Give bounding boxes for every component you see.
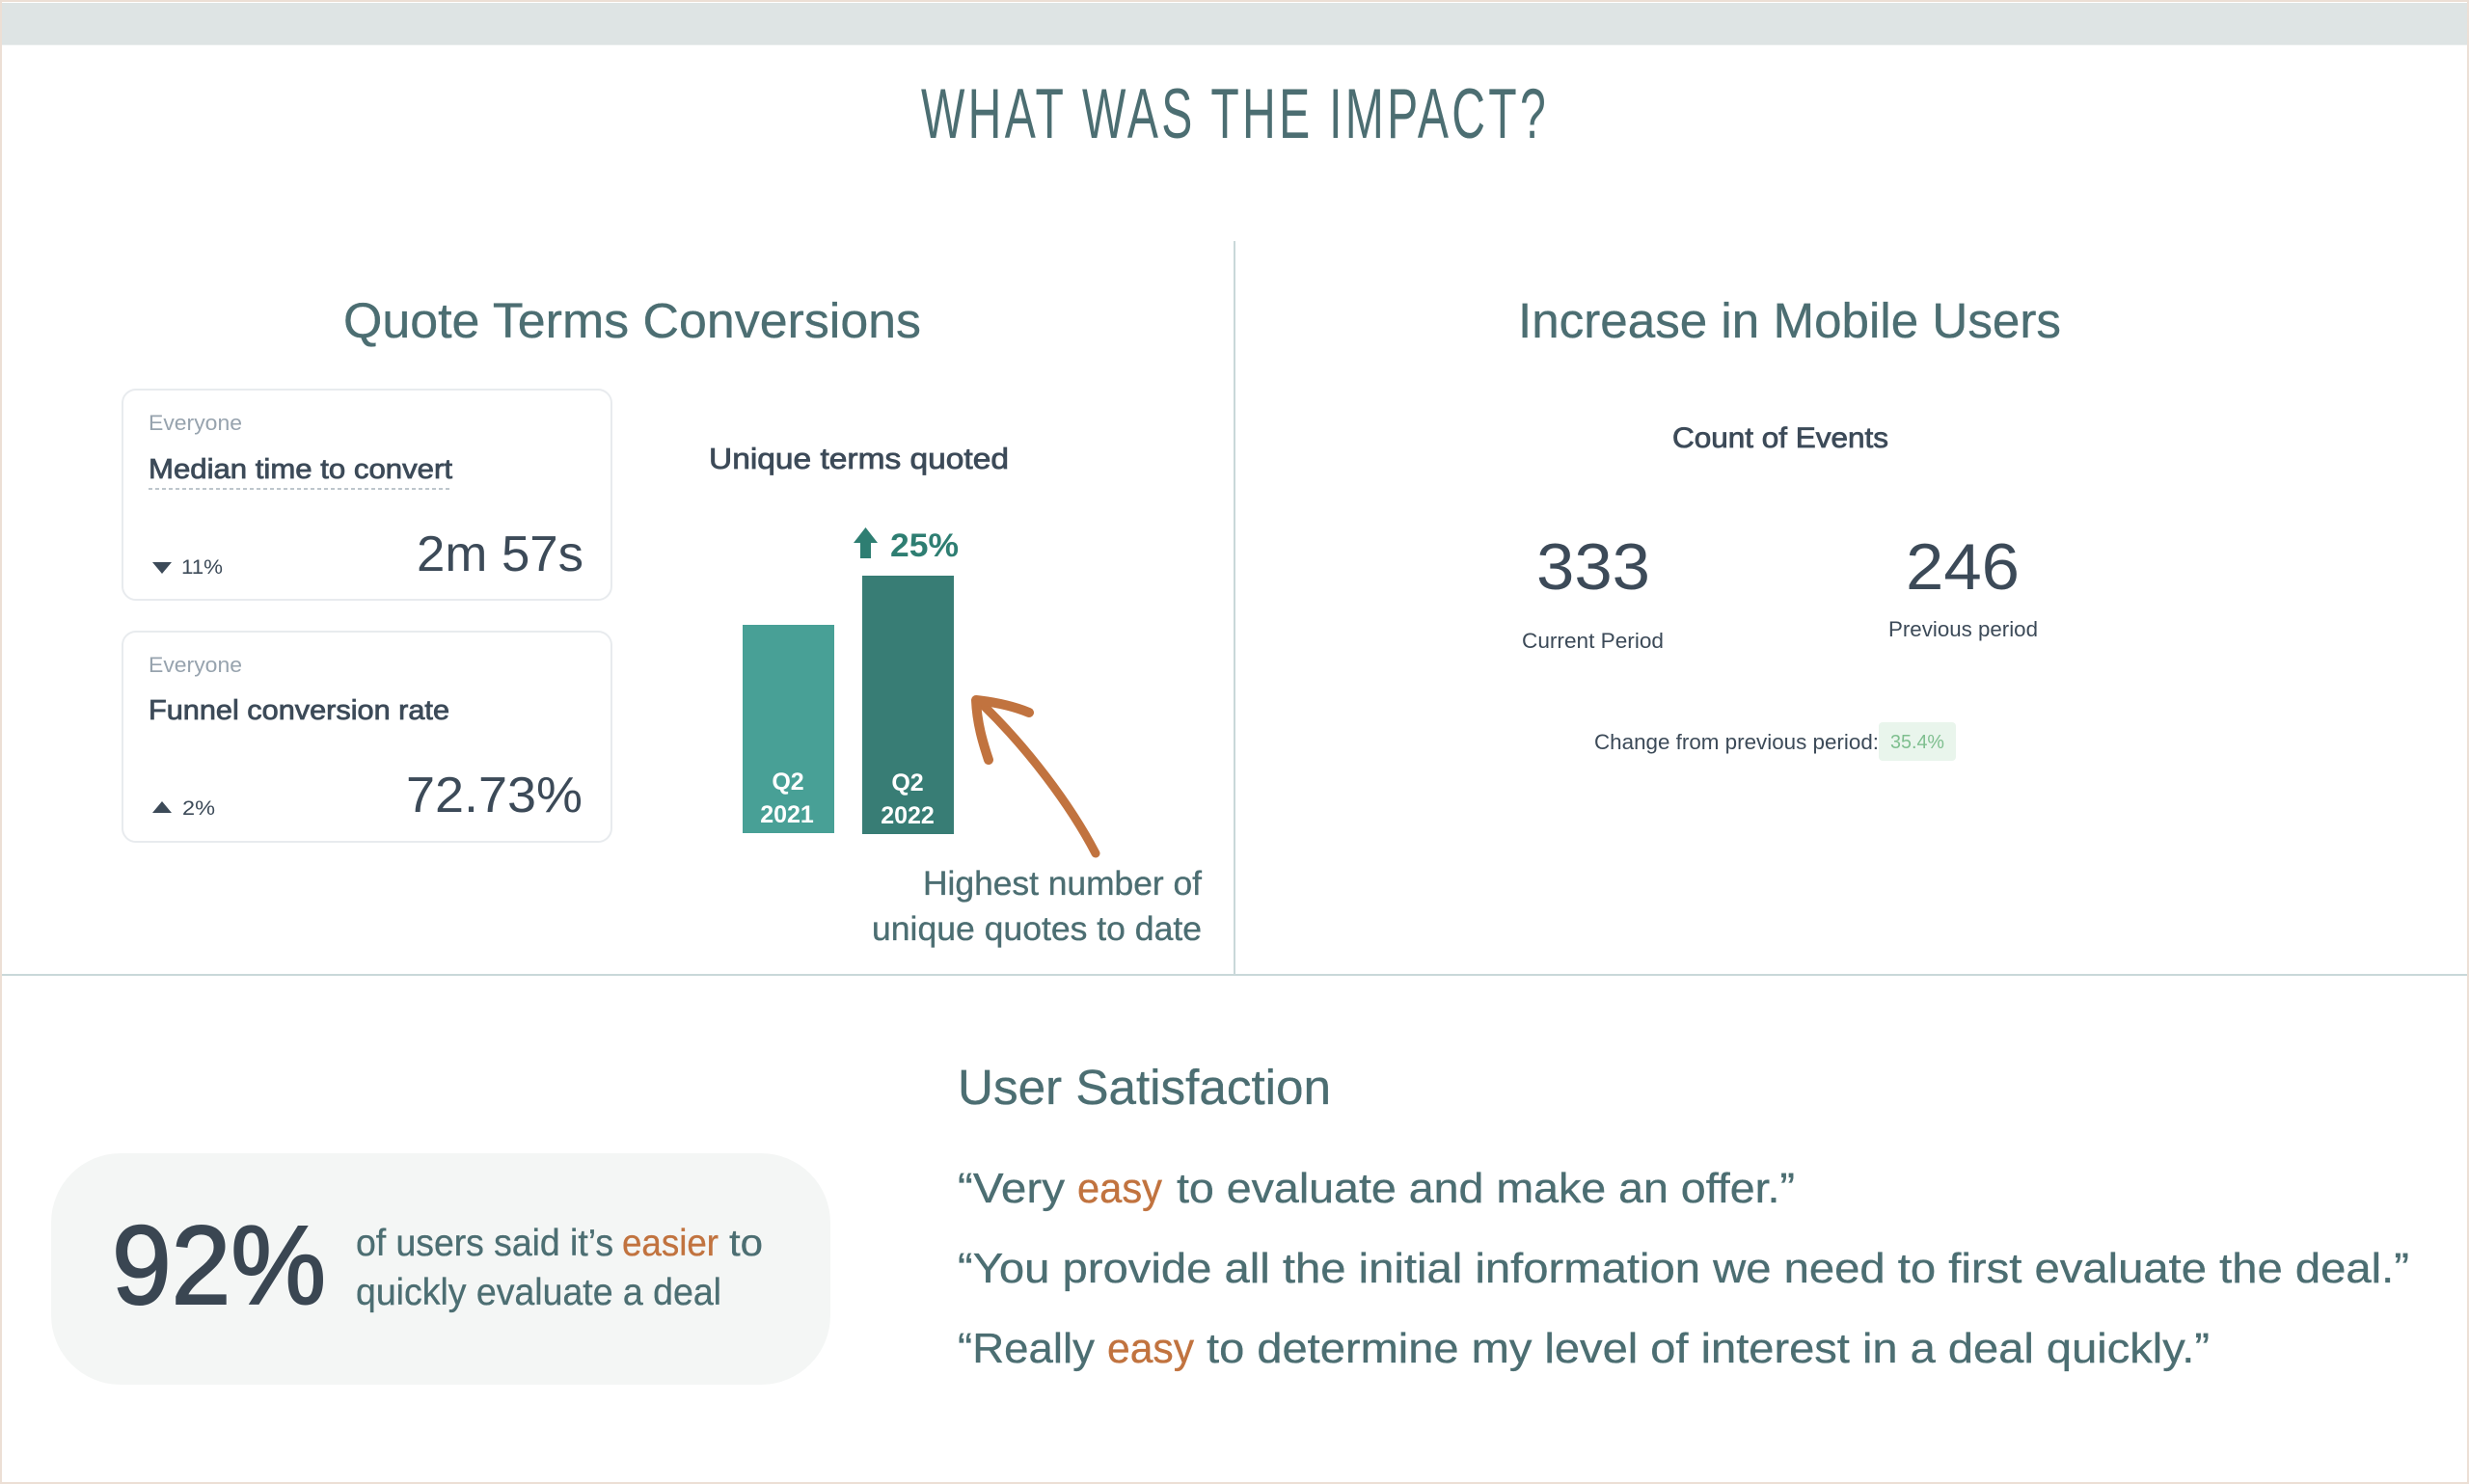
change from previous period: 35.4% xyxy=(1890,732,1944,753)
panel: quote terms conversions xyxy=(122,293,1202,948)
callout: 92 percent pill: of users said it’s xyxy=(356,1223,613,1264)
bar chart: unique terms quoted: Q2 xyxy=(891,769,924,796)
metric: previous period: 246 xyxy=(1906,530,2020,604)
callout: 92 percent pill xyxy=(51,1153,830,1385)
bar chart: unique terms quoted: 2021 xyxy=(760,801,814,828)
callout: highest number of unique quotes: Highest number of xyxy=(923,865,1202,903)
quotes xyxy=(958,1165,2409,1372)
card: median time to convert: Everyone xyxy=(149,411,242,435)
quotes: “Really xyxy=(958,1325,1095,1372)
panel: increase in mobile users xyxy=(1518,293,2061,761)
quotes: to evaluate and make an offer.” xyxy=(1177,1165,1795,1212)
callout: 92 percent pill: 92% xyxy=(112,1202,326,1328)
heading: user satisfaction: User Satisfaction xyxy=(958,1060,1331,1115)
quotes: to determine my level of interest in a deal quickly.” xyxy=(1207,1325,2210,1372)
quotes: “You provide all the initial information we need to first evaluate the deal.” xyxy=(958,1245,2409,1292)
callout: highest number of unique quotes xyxy=(872,865,1202,948)
metric: previous period: Previous period xyxy=(1888,617,2038,641)
card: funnel conversion rate: 72.73% xyxy=(406,768,583,823)
heading: increase in mobile users: Increase in Mobile Users xyxy=(1518,293,2061,348)
card: funnel conversion rate xyxy=(122,632,611,842)
change from previous period xyxy=(1594,722,1956,761)
heading: quote terms conversions: Quote Terms Conversions xyxy=(343,293,921,348)
bar chart: unique terms quoted: Unique terms quoted xyxy=(709,442,1009,475)
bar chart: unique terms quoted: 25% xyxy=(890,527,959,564)
top band xyxy=(2,3,2467,44)
card: median time to convert xyxy=(122,390,611,600)
callout: highest number of unique quotes: unique quotes to date xyxy=(872,910,1202,948)
panel: user satisfaction xyxy=(958,1060,2409,1372)
callout: 92 percent pill: easier xyxy=(622,1223,719,1264)
bar chart: unique terms quoted xyxy=(709,442,1009,834)
bar chart: unique terms quoted: 2022 xyxy=(881,802,935,829)
arrow: hand-drawn pointing at 2022 bar xyxy=(976,700,1096,853)
callout: 92 percent pill: quickly evaluate a deal xyxy=(356,1272,721,1313)
card: median time to convert: 2m 57s xyxy=(417,526,583,582)
bar chart: unique terms quoted: Q2 xyxy=(772,769,804,796)
card: funnel conversion rate: Funnel conversion rate xyxy=(149,695,449,726)
quotes: “Very xyxy=(958,1165,1065,1212)
callout: 92 percent pill: to xyxy=(729,1223,763,1264)
metric: current period: 333 xyxy=(1536,530,1650,604)
chart title: count of events: Count of Events xyxy=(1672,422,1888,454)
metric: current period xyxy=(1522,530,1664,653)
icon: up arrow xyxy=(854,527,878,558)
metric: current period: Current Period xyxy=(1522,629,1664,653)
card: funnel conversion rate: Everyone xyxy=(149,653,242,677)
quotes: easy xyxy=(1107,1325,1194,1372)
change from previous period: Change from previous period: xyxy=(1594,730,1879,754)
card: median time to convert: 11% xyxy=(181,556,223,579)
title: WHAT WAS THE IMPACT? xyxy=(921,75,1549,153)
metric: previous period xyxy=(1888,530,2038,641)
card: median time to convert: Median time to convert xyxy=(149,454,452,485)
quotes: easy xyxy=(1077,1165,1162,1212)
card: funnel conversion rate: 2% xyxy=(182,797,215,820)
